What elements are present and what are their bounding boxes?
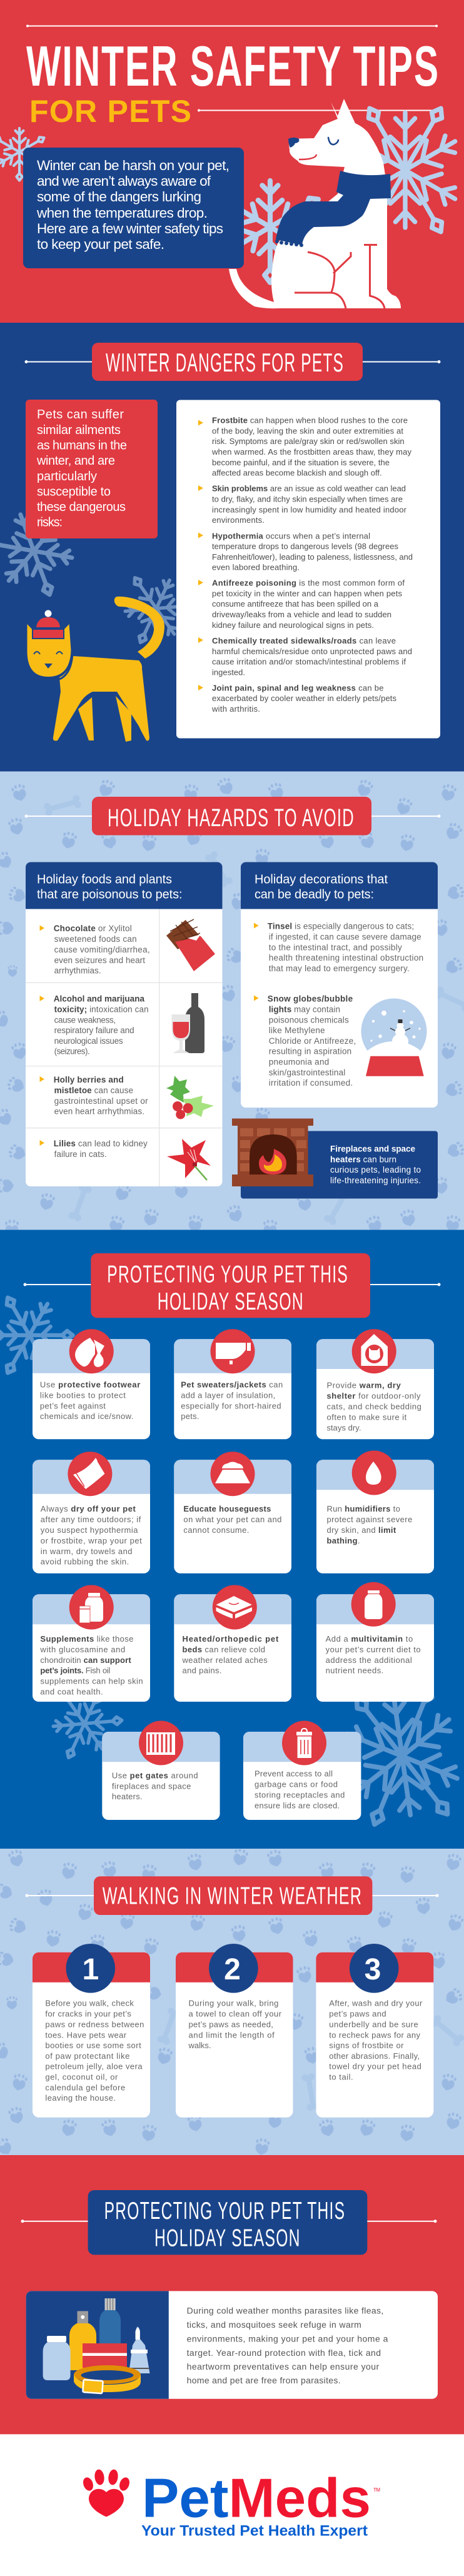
icon: vitamin bottle bbox=[351, 1582, 396, 1627]
card: dry off: or frostbite, wrap your pet bbox=[41, 1536, 142, 1545]
snow globes item: skin/gastrointestinal bbox=[269, 1068, 345, 1077]
tinsel item: if ingested, it can cause severe damage bbox=[269, 932, 421, 942]
callout: pets can suffer: winter, and are bbox=[36, 454, 115, 468]
chocolate item: arrhythmias. bbox=[54, 966, 101, 975]
icon: fireplace bbox=[232, 1118, 313, 1186]
card: dry off: in warm, dry towels and bbox=[41, 1547, 133, 1556]
skin problems item: to dry, flaky, and itchy skin especially when times are bbox=[212, 495, 403, 504]
card: pet gates bbox=[102, 1721, 220, 1820]
card: footwear bbox=[33, 1329, 150, 1439]
intro callout: some of the dangers lurking bbox=[37, 189, 201, 205]
chemicals item: Chemically treated sidewalks/roads can leave bbox=[212, 636, 396, 645]
tinsel item bbox=[254, 922, 423, 973]
holly item bbox=[40, 1075, 148, 1116]
card: multivitamin: nutrient needs. bbox=[326, 1666, 383, 1675]
alcohol item: toxicity; intoxication can bbox=[54, 1004, 149, 1014]
panel: fireplaces: curious pets, leading to bbox=[330, 1165, 421, 1174]
panel: foods and plants bbox=[26, 862, 223, 1186]
antifreeze item: driveway/leaks from a vehicle and lead to sudden bbox=[212, 610, 391, 619]
card: step 3: underbelly and be sure bbox=[329, 2020, 418, 2029]
icon: pet bed bbox=[213, 1585, 257, 1630]
card: beds: and pains. bbox=[183, 1666, 221, 1675]
card: humidifiers: bathing. bbox=[326, 1536, 360, 1545]
card: step 3: towel dry your pet head bbox=[329, 2062, 421, 2071]
card: multivitamin: Add a multivitamin to bbox=[326, 1634, 413, 1644]
panel: fireplaces: Fireplaces and space bbox=[330, 1144, 415, 1153]
card: beds: weather related aches bbox=[181, 1655, 268, 1665]
number badge 3: 3 bbox=[365, 1953, 381, 1986]
card: footwear: like booties to protect bbox=[40, 1390, 126, 1400]
frostbite item: Frostbite can happen when blood rushes to the core bbox=[212, 415, 408, 425]
skin problems item: environments. bbox=[212, 515, 265, 525]
card: garbage: storing receptacles and bbox=[255, 1790, 345, 1799]
section: parasites bbox=[0, 2155, 464, 2434]
panel: fireplaces: heaters can burn bbox=[330, 1154, 396, 1164]
trademark: TM bbox=[373, 2487, 380, 2493]
card: step 2: During your walk, bring bbox=[189, 1999, 278, 2008]
icon: towel bbox=[68, 1452, 112, 1496]
logo wordmark: PetMeds bbox=[142, 2467, 371, 2528]
card: supplements: pet’s joints. Fish oil bbox=[40, 1666, 111, 1675]
hypothermia item: Hypothermia occurs when a pet’s internal bbox=[212, 531, 370, 540]
card: beds: beds can relieve cold bbox=[183, 1645, 265, 1654]
icon: dog with scarf bbox=[229, 99, 401, 308]
snow globes item: poisonous chemicals bbox=[269, 1015, 349, 1024]
panel: parasite prevention: home and pet are free from parasites. bbox=[187, 2375, 341, 2385]
snow globes item: irritation if consumed. bbox=[269, 1078, 353, 1088]
card: step 2: a towel to clean off your bbox=[189, 2009, 282, 2019]
card: supplements: and coat health. bbox=[40, 1687, 103, 1696]
panel: fireplaces bbox=[232, 1118, 438, 1198]
icon: background snowflakes bbox=[0, 1283, 464, 1831]
panel: dangers list bbox=[176, 400, 440, 738]
antifreeze item bbox=[198, 578, 405, 630]
card: shelter bbox=[316, 1329, 434, 1439]
icon: water drop bbox=[352, 1451, 396, 1495]
frostbite item: when warmed. As the frostbitten areas thaw, they may bbox=[211, 447, 411, 457]
footer: PetMeds logo bbox=[0, 2434, 464, 2576]
frostbite item: of the body, leaving the skin and outer extremities at bbox=[212, 426, 403, 435]
alcohol item bbox=[40, 994, 149, 1056]
hero section bbox=[0, 0, 464, 323]
joint pain item bbox=[198, 684, 396, 714]
card: supplements: supplements can help skin bbox=[40, 1677, 143, 1686]
number badge 1 bbox=[66, 1944, 115, 1993]
snow globes item bbox=[254, 994, 356, 1088]
chemicals item: ingested. bbox=[212, 667, 245, 677]
icon: snowflakes bbox=[0, 106, 463, 283]
icon: trash can bbox=[282, 1721, 326, 1765]
chemicals item bbox=[198, 636, 412, 677]
subtitle: FOR PETS bbox=[29, 94, 191, 129]
tagline: Your Trusted Pet Health Expert bbox=[141, 2523, 368, 2540]
panel: foods and plants: Holiday foods and plants bbox=[37, 872, 172, 886]
card: step 3: signs of frostbite or bbox=[329, 2041, 404, 2050]
card: step 1: for cracks in your pet’s bbox=[45, 2009, 131, 2019]
panel: decorations: Holiday decorations that bbox=[255, 872, 388, 886]
hypothermia item: Fahrenheit/lower), leading to paleness, listlessness, and bbox=[212, 552, 413, 562]
callout: pets can suffer: Pets can suffer bbox=[37, 408, 124, 422]
chocolate item: sweetened foods can bbox=[54, 934, 137, 944]
heading bbox=[88, 2190, 367, 2255]
heading: HOLIDAY SEASON bbox=[154, 2225, 301, 2251]
section: holiday hazards bbox=[0, 772, 464, 1236]
intro callout: and we aren’t always aware of bbox=[37, 173, 211, 189]
antifreeze item: pet toxicity in the winter and can happen when pets bbox=[212, 589, 403, 599]
alcohol item: cause weakness, bbox=[54, 1015, 116, 1024]
panel: parasite prevention bbox=[26, 2291, 438, 2399]
card: multivitamin: address the additional bbox=[326, 1655, 412, 1665]
panel: parasite prevention: During cold weather months parasites like fleas, bbox=[187, 2306, 383, 2316]
card: pet gates: heaters. bbox=[112, 1792, 143, 1801]
callout: pets can suffer: susceptible to bbox=[37, 485, 111, 499]
card: step 1: Before you walk, check bbox=[45, 1999, 134, 2008]
antifreeze item: kidney failure and neurological signs in pets. bbox=[212, 620, 374, 630]
icon: background snowflakes bbox=[0, 499, 203, 658]
card: shelter: shelter for outdoor-only bbox=[326, 1392, 421, 1401]
panel: parasite prevention: ticks, and mosquitoes seek refuge in warm bbox=[187, 2320, 361, 2330]
callout: pets can suffer: similar ailments bbox=[37, 423, 121, 437]
chocolate item bbox=[40, 924, 150, 975]
card: supplements: Supplements like those bbox=[40, 1634, 133, 1644]
card: supplements: chondroitin can support bbox=[40, 1655, 131, 1665]
tinsel item: Tinsel is especially dangerous to cats; bbox=[268, 922, 414, 931]
chocolate item: even seizures and heart bbox=[54, 956, 145, 965]
panel: parasite prevention: heartworm preventatives can help ensure your bbox=[187, 2361, 380, 2371]
card: supplements: with glucosamine and bbox=[39, 1645, 125, 1654]
lilies item: Lilies can lead to kidney bbox=[54, 1139, 148, 1148]
chocolate item: Chocolate or Xylitol bbox=[54, 924, 132, 933]
card: beds bbox=[174, 1585, 291, 1702]
frostbite item bbox=[198, 415, 411, 477]
icon: lily bbox=[167, 1139, 211, 1180]
intro callout bbox=[23, 148, 244, 268]
card: beds: Heated/orthopedic pet bbox=[183, 1634, 279, 1644]
intro callout: Winter can be harsh on your pet, bbox=[37, 158, 229, 173]
card: houseguests: on what your pet can and bbox=[183, 1515, 281, 1524]
chemicals item: harmful chemicals/residue onto unprotected paws and bbox=[212, 647, 412, 656]
snow globes item: like Methylene bbox=[269, 1026, 325, 1035]
panel: parasite prevention: environments, making your pet and your home a bbox=[187, 2333, 388, 2343]
card: garbage bbox=[243, 1721, 361, 1820]
alcohol item: neurological issues bbox=[54, 1036, 123, 1046]
number badge 2 bbox=[209, 1944, 258, 1993]
card: humidifiers bbox=[316, 1451, 434, 1573]
number badge 2: 2 bbox=[224, 1953, 241, 1986]
antifreeze item: consume antifreeze that has been spilled on a bbox=[212, 599, 379, 609]
card: step 2: and limit the length of bbox=[189, 2030, 275, 2039]
snow globes item: lights may contain bbox=[269, 1004, 340, 1014]
card: garbage: Prevent access to all bbox=[255, 1769, 333, 1779]
icon: pet gate bbox=[139, 1721, 183, 1765]
holly item: gastrointestinal upset or bbox=[54, 1096, 148, 1106]
card: step 3: to recheck paws for any bbox=[329, 2030, 420, 2039]
card: step 3: After, wash and dry your bbox=[329, 1999, 423, 2008]
heading: HOLIDAY SEASON bbox=[158, 1288, 304, 1315]
section: protecting your pet bbox=[0, 1230, 464, 1849]
alcohol item: (seizures). bbox=[54, 1046, 90, 1056]
frostbite item: risk. Symptoms are pale/gray skin or red/swollen skin bbox=[212, 437, 405, 446]
hypothermia item bbox=[198, 531, 413, 572]
icon: sweater bbox=[210, 1329, 255, 1373]
tinsel item: that may lead to emergency surgery. bbox=[269, 964, 410, 973]
heading bbox=[94, 1876, 372, 1915]
card: multivitamin bbox=[316, 1582, 434, 1702]
skin problems item: increasingly spent in low humidity and heated indoor bbox=[212, 505, 407, 515]
lilies item: failure in cats. bbox=[54, 1149, 107, 1159]
card: step 1 bbox=[33, 1944, 150, 2118]
card: pet gates: fireplaces and space bbox=[112, 1781, 191, 1791]
snow globes item: Snow globes/bubble bbox=[268, 994, 353, 1003]
card: dry off: after any time outdoors; if bbox=[41, 1515, 141, 1524]
intro callout: to keep your pet safe. bbox=[37, 236, 164, 252]
card: supplements bbox=[33, 1585, 150, 1702]
holly item: Holly berries and bbox=[54, 1075, 124, 1084]
icon: flea and tick products bbox=[43, 2298, 149, 2393]
joint pain item: with arthritis. bbox=[211, 704, 260, 714]
icon: wine bottle and glass bbox=[171, 993, 204, 1053]
card: sweaters: add a layer of insulation, bbox=[181, 1390, 275, 1400]
lilies item bbox=[40, 1139, 148, 1159]
callout: pets can suffer: risks: bbox=[37, 515, 63, 529]
panel: decorations bbox=[241, 862, 438, 1108]
panel: foods and plants: that are poisonous to pets: bbox=[37, 888, 183, 902]
number badge 3 bbox=[350, 1944, 399, 1993]
callout: pets can suffer bbox=[26, 400, 158, 538]
joint pain item: exacerbated by cooler weather in elderly pets/pets bbox=[212, 694, 396, 703]
snow globes item: resulting in aspiration bbox=[269, 1046, 351, 1056]
antifreeze item: Antifreeze poisoning is the most common form of bbox=[212, 578, 405, 588]
frostbite item: affected areas become blackish and slough off. bbox=[212, 468, 382, 477]
heading bbox=[91, 1253, 370, 1318]
alcohol item: respiratory failure and bbox=[54, 1026, 134, 1035]
icon: chocolate bar bbox=[166, 919, 215, 971]
card: multivitamin: your pet’s current diet to bbox=[326, 1645, 421, 1654]
joint pain item: Joint pain, spinal and leg weakness can be bbox=[212, 684, 384, 693]
card: step 2: pet’s paws as needed, bbox=[189, 2020, 273, 2029]
card: dry off: you suspect hypothermia bbox=[41, 1525, 138, 1535]
panel: decorations: can be deadly to pets: bbox=[255, 888, 374, 902]
holly item: mistletoe can cause bbox=[54, 1086, 133, 1095]
callout: pets can suffer: as humans in the bbox=[37, 439, 127, 453]
card: garbage: garbage cans or food bbox=[255, 1780, 338, 1789]
card: step 2 bbox=[176, 1944, 293, 2118]
icon: holly bbox=[166, 1076, 214, 1119]
tinsel item: health threatening intestinal obstruction bbox=[269, 953, 423, 962]
panel: parasite prevention: target. Year-round protection with flea, tick and bbox=[187, 2348, 381, 2358]
card: sweaters: Pet sweaters/jackets can bbox=[181, 1380, 283, 1389]
card: step 1: booties or use some sort bbox=[45, 2041, 141, 2050]
intro callout: when the temperatures drop. bbox=[36, 205, 208, 221]
card: step 2: walks. bbox=[188, 2041, 211, 2050]
card: dry off: avoid rubbing the skin. bbox=[41, 1557, 129, 1567]
card: sweaters bbox=[174, 1329, 291, 1439]
card: step 1: of paw protectant like bbox=[45, 2051, 129, 2061]
panel: fireplaces: life-threatening injuries. bbox=[330, 1176, 421, 1185]
chemicals item: cause irritation and/or stomach/intestinal problems if bbox=[212, 657, 406, 666]
card: footwear: pet’s feet against bbox=[40, 1401, 106, 1410]
card: step 3: pet’s paws and bbox=[329, 2009, 386, 2019]
card: humidifiers: dry skin, and limit bbox=[326, 1525, 396, 1535]
heading bbox=[92, 797, 371, 836]
card: dry off bbox=[33, 1452, 150, 1573]
card: footwear: chemicals and ice/snow. bbox=[40, 1412, 133, 1421]
card: shelter: often to make sure it bbox=[326, 1412, 407, 1422]
card: step 3: other abrasions. Finally, bbox=[329, 2051, 420, 2061]
hypothermia item: temperature drops to dangerous levels (98 degrees bbox=[212, 542, 399, 551]
card: houseguests bbox=[174, 1452, 291, 1573]
section: winter dangers bbox=[0, 323, 464, 772]
skin problems item bbox=[198, 484, 407, 525]
icon: cat with hat bbox=[27, 597, 164, 742]
icon: food bowl bbox=[210, 1452, 255, 1496]
card: houseguests: cannot consume. bbox=[183, 1525, 249, 1535]
card: step 3: to tail. bbox=[329, 2073, 353, 2082]
heading bbox=[92, 343, 363, 381]
card: dry off: Always dry off your pet bbox=[41, 1504, 136, 1513]
card: step 1: leaving the house. bbox=[45, 2093, 116, 2103]
tinsel item: to the intestinal tract, and possibly bbox=[269, 943, 402, 952]
callout: pets can suffer: these dangerous bbox=[37, 500, 126, 514]
icon: paw logo bbox=[81, 2469, 131, 2517]
icon: booties bbox=[69, 1329, 114, 1373]
card: step 1: calendula gel before bbox=[45, 2083, 125, 2092]
skin problems item: Skin problems are an issue as cold weather can lead bbox=[212, 484, 406, 493]
card: step 1: petroleum jelly, aloe vera bbox=[45, 2062, 143, 2071]
card: garbage: ensure lids are closed. bbox=[255, 1801, 340, 1810]
card: step 1: gel, coconut oil, or bbox=[45, 2073, 118, 2082]
card: shelter: Provide warm, dry bbox=[326, 1381, 401, 1390]
card: step 3 bbox=[316, 1944, 433, 2118]
number badge 1: 1 bbox=[82, 1953, 99, 1986]
card: shelter: cats, and check bedding bbox=[326, 1402, 421, 1411]
icon: snow globe bbox=[361, 998, 426, 1076]
alcohol item: Alcohol and marijuana bbox=[54, 994, 144, 1003]
card: humidifiers: Run humidifiers to bbox=[326, 1504, 400, 1513]
icon: supplement bottles bbox=[69, 1585, 114, 1630]
card: sweaters: especially for short-haired bbox=[181, 1401, 281, 1410]
hypothermia item: even labored breathing. bbox=[212, 562, 300, 572]
paw pattern bbox=[0, 1847, 464, 2158]
holly item: even heart arrhythmias. bbox=[54, 1106, 144, 1116]
snow globes item: pneumonia and bbox=[269, 1057, 329, 1066]
snow globes item: Chloride or Antifreeze, bbox=[269, 1036, 356, 1046]
intro callout: Here are a few winter safety tips bbox=[37, 221, 223, 236]
section: walking in winter weather bbox=[0, 1847, 464, 2158]
card: humidifiers: protect against severe bbox=[326, 1515, 412, 1524]
paw pattern bbox=[0, 776, 464, 1236]
card: step 1: toes. Have pets wear bbox=[45, 2030, 127, 2039]
chocolate item: cause vomiting/diarrhea, bbox=[54, 945, 150, 954]
card: shelter: stays dry. bbox=[326, 1423, 361, 1432]
card: sweaters: pets. bbox=[181, 1412, 199, 1421]
frostbite item: become painful, and if the situation is severe, the bbox=[212, 458, 390, 467]
card: houseguests: Educate houseguests bbox=[183, 1504, 271, 1513]
card: pet gates: Use pet gates around bbox=[112, 1770, 198, 1780]
card: footwear: Use protective footwear bbox=[40, 1380, 140, 1389]
card: step 1: paws or redness between bbox=[45, 2020, 144, 2029]
icon: cat house bbox=[352, 1329, 396, 1373]
callout: pets can suffer: particularly bbox=[37, 470, 97, 483]
